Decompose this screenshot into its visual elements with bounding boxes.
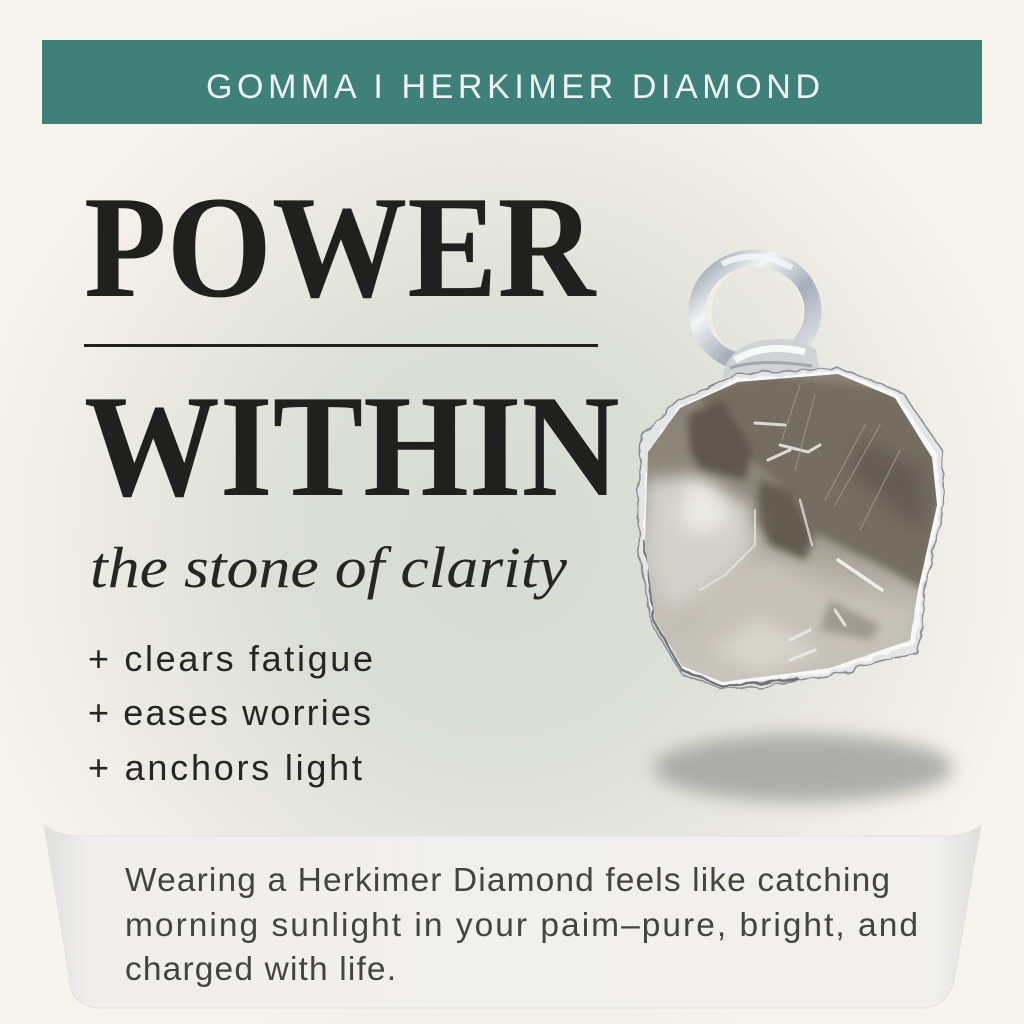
icon: silver ring bail	[697, 256, 820, 386]
title: WITHIN	[84, 366, 620, 527]
header banner: GOMMA I HERKIMER DIAMOND	[206, 68, 820, 106]
header banner	[42, 40, 982, 124]
crystal body	[645, 374, 937, 682]
tagline: the stone of clarity	[90, 535, 567, 600]
quote banner	[44, 825, 981, 1008]
pendant shadow	[653, 734, 953, 802]
benefits list	[88, 638, 373, 788]
title: POWER	[84, 167, 597, 328]
benefits list: + eases worries	[88, 692, 371, 733]
pendant illustration	[630, 256, 950, 690]
silver bezel	[638, 368, 944, 688]
quote banner: morning sunlight in your paim–pure, bright, and	[125, 907, 918, 944]
benefits list: + anchors light	[88, 747, 362, 788]
title	[84, 167, 620, 527]
benefits list: + clears fatigue	[88, 638, 373, 679]
crystal highlights	[700, 385, 900, 660]
quote banner: Wearing a Herkimer Diamond feels like catching	[125, 862, 890, 899]
quote banner: charged with life.	[125, 951, 396, 988]
